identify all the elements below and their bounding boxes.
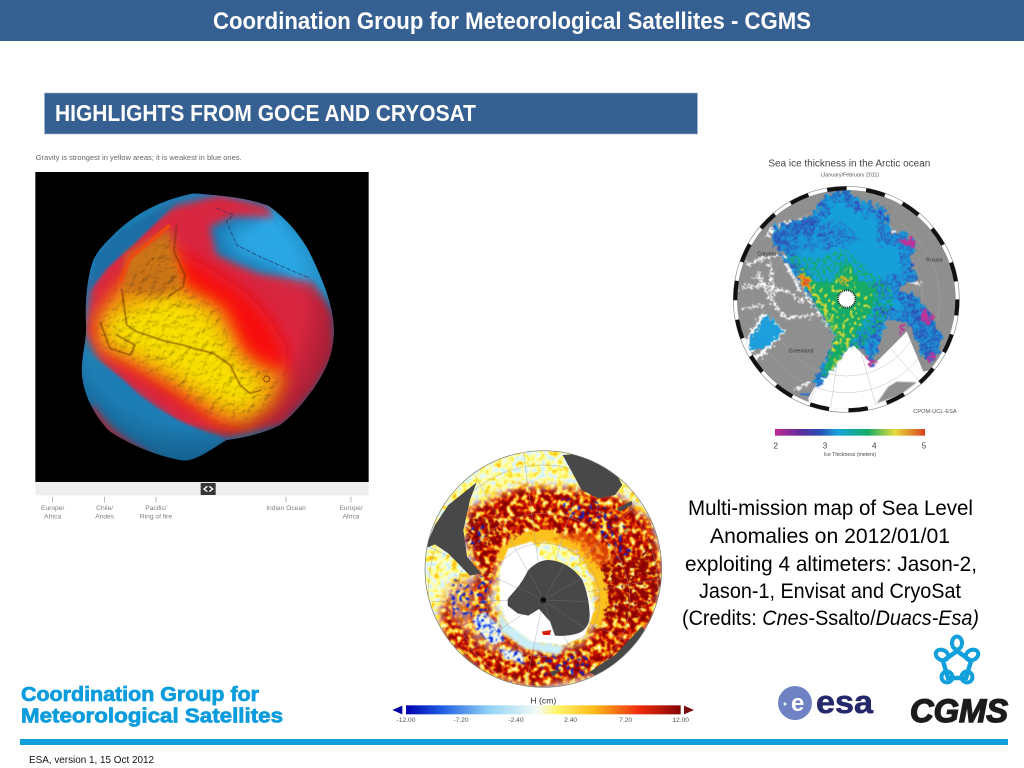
longitude axis labels: Ring of fire [140, 514, 172, 521]
panel: GOCE geoid image [35, 153, 369, 521]
sea level colour bar: -7.20 [453, 717, 469, 724]
ice thickness colour bar: 5 [922, 440, 927, 450]
arctic map place labels: Canada [757, 251, 776, 257]
sea level map description: exploiting 4 altimeters: Jason-2, [685, 553, 977, 576]
header bar [0, 0, 1024, 41]
CGMS star icon [934, 636, 980, 682]
longitude axis labels: Africa [44, 514, 61, 521]
arctic map subtitle: (January/February 2011) [821, 173, 879, 179]
longitude axis labels: Pacific/ [145, 505, 167, 512]
arctic map place labels: Greenland [789, 348, 813, 354]
sea level map description: (Credits: Cnes-Ssalto/Duacs-Esa) [682, 607, 979, 630]
sea level colour bar: 7.20 [619, 717, 632, 724]
header title: Coordination Group for Meteorological Satellites - CGMS [213, 8, 811, 35]
sea level map description [682, 497, 979, 630]
ice thickness colour bar: Ice Thickness (meters) [824, 452, 876, 458]
arctic map title: Sea ice thickness in the Arctic ocean [768, 159, 930, 170]
ESA logo: esa [816, 684, 873, 720]
polar map disc [730, 182, 963, 418]
Coordination Group logotype: Meteorological Satellites [21, 706, 283, 728]
sea level colour bar: 12.00 [672, 717, 689, 724]
black image background [35, 172, 369, 482]
section heading: HIGHLIGHTS FROM GOCE AND CRYOSAT [55, 100, 476, 126]
Coordination Group logotype [21, 684, 283, 728]
longitude axis labels: Indian Ocean [266, 505, 306, 512]
arctic map place labels [757, 251, 943, 354]
panel: Arctic sea ice thickness map [730, 159, 963, 458]
sea level colour bar: 2.40 [564, 717, 577, 724]
sea level map description: Anomalies on 2012/01/01 [710, 525, 950, 548]
sea level colour bar: H (cm) [530, 695, 556, 705]
longitude axis labels: Europe/ [339, 505, 363, 512]
geoid globe [77, 188, 340, 465]
section heading [44, 93, 698, 134]
sea level colour bar: -2.40 [508, 717, 524, 724]
longitude axis labels: Andes [95, 514, 115, 521]
ice thickness colour bar [773, 429, 927, 458]
image control strip [35, 482, 369, 495]
footer version note: ESA, version 1, 15 Oct 2012 [29, 754, 154, 766]
ice thickness colour bar: 3 [823, 440, 828, 450]
sea level colour bar [392, 695, 694, 724]
longitude axis labels: Europe/ [41, 505, 64, 512]
panel: sea level anomaly map [392, 448, 694, 724]
sea level map description: Jason-1, Envisat and CryoSat [699, 580, 961, 603]
ESA logo [778, 684, 873, 720]
longitude axis labels [41, 497, 363, 521]
sea level map description: Multi-mission map of Sea Level [688, 497, 973, 520]
southern hemisphere globe [424, 450, 662, 688]
ice thickness colour bar: 4 [872, 440, 877, 450]
footer rule [20, 739, 1008, 745]
map credit: CPOM-UCL-ESA [913, 409, 957, 415]
longitude axis labels: Chile/ [96, 505, 113, 512]
geoid caption: Gravity is strongest in yellow areas; it is weakest in blue ones. [36, 153, 242, 162]
CGMS wordmark: CGMS [910, 693, 1009, 729]
sea level colour bar: -12.00 [397, 717, 416, 724]
ESA logo: e [791, 690, 804, 717]
ice thickness colour bar: 2 [773, 440, 778, 450]
slider handle icon [201, 483, 216, 495]
longitude axis labels: Africa [342, 514, 360, 521]
Coordination Group logotype: Coordination Group for [21, 684, 259, 706]
arctic map place labels: Russia [926, 258, 943, 264]
